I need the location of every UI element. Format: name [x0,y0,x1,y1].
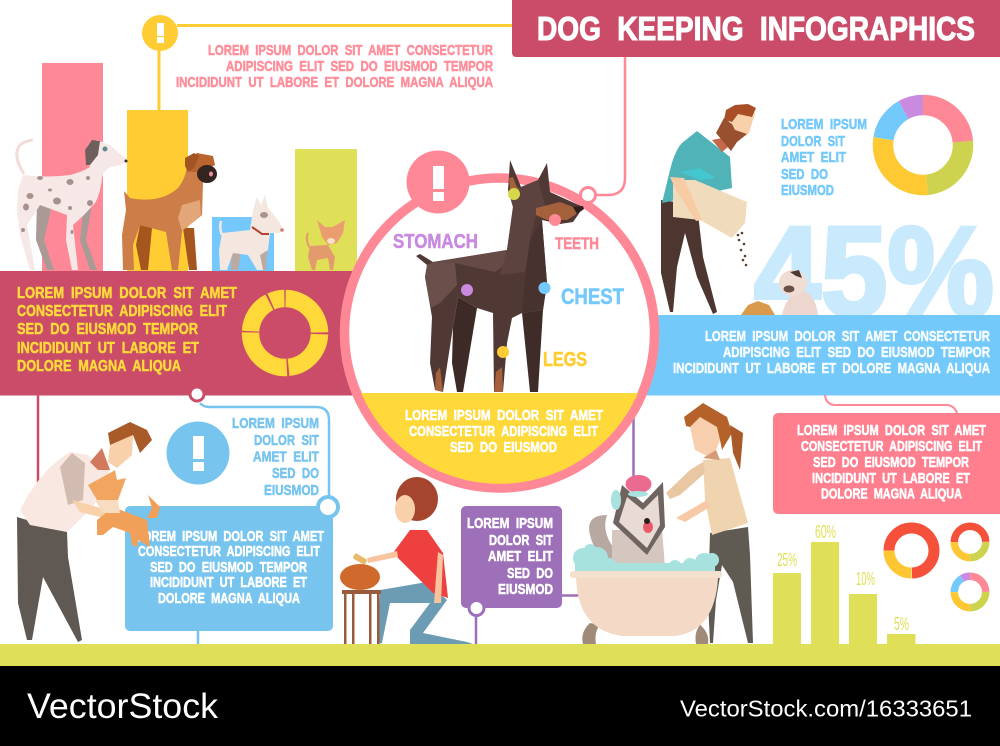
panel: purple text panel [461,506,562,608]
donut: small five part [949,571,991,613]
icon: yellow exclamation [142,15,178,51]
text block: top right blue lorem: DOLOR SIT [781,134,845,150]
connector node: purple panel [469,600,484,616]
food bowl [741,301,775,315]
donut: large red [889,528,934,573]
text block: crimson panel lorem [17,285,237,375]
text block: crimson panel lorem: SED DO EIUSMOD TEMPOR [17,321,198,338]
text block: blue panel lorem [673,329,990,377]
dog: dalmatian [17,140,127,270]
central circle [344,178,654,488]
text block: blue callout lorem: LOREM IPSUM [232,416,319,432]
text block: purple lorem: DOLOR SIT [489,533,553,549]
bar chart: percentages: 25% [777,550,797,570]
text block: pink panel lorem [797,423,986,502]
text block: blue lower lorem: CONSECTETUR ADIPISCING ELIT [138,544,320,560]
text block: crimson panel lorem: DOLORE MAGNA ALIQUA [17,358,181,375]
top yellow callout connector [159,26,515,110]
bar chart: percentages: 5% [894,614,909,634]
text block: top right blue lorem [781,117,867,199]
text block: blue lower lorem: SED DO EIUSMOD TEMPOR [150,560,307,576]
text block: blue callout lorem: EIUSMOD [264,483,319,499]
panel: pink text panel [773,413,1000,514]
donut: yellow segmented [239,287,331,379]
connector node: crimson panel [190,387,204,401]
bar chart: dog sizes [42,63,357,271]
bar chart: percentages [773,522,916,644]
panel: blue text panel lower [125,506,333,631]
text block: top pink lorem [176,43,493,91]
text block: purple lorem: LOREM IPSUM [467,516,553,532]
title banner [512,0,1000,57]
text block: blue lower lorem: INCIDIDUNT UT LABORE ET [150,575,307,591]
text block: blue lower lorem: DOLORE MAGNA ALIQUA [158,591,300,607]
text block: top right blue lorem: EIUSMOD [781,183,834,199]
donut: top right [869,91,977,199]
text block: purple lorem [467,516,553,598]
watermark: image id: VectorStock.com/16333651 [680,696,972,722]
anatomy markers [461,188,561,358]
label: chest: CHEST [561,284,624,309]
ground strip [0,644,1000,666]
bath foam [573,544,719,574]
text block: purple lorem: EIUSMOD [498,582,553,598]
person: woman washing dog [666,403,753,643]
text block: crimson panel lorem: CONSECTETUR ADIPISCING ELIT [17,303,227,320]
bar chart: percentages: 60% [815,522,836,542]
text block: top pink lorem: ADIPISCING ELIT SED DO EIUSMOD TEMPOR [226,59,493,75]
bar chart: percentages: 10% [856,569,875,589]
dog: pug [779,270,818,315]
text block: blue lower lorem [136,529,324,607]
connector node: blue panel [318,497,338,517]
person: kneeling woman grooming [340,477,473,644]
dog: corgi [88,470,160,547]
dog: chihuahua [307,220,345,270]
connector: blue callout [198,403,329,644]
panel: crimson text panel [0,271,360,396]
dog: husky in bath [589,475,665,567]
text block: top pink lorem: LOREM IPSUM DOLOR SIT AMET CONSECTETUR [208,43,493,59]
text block: crimson panel lorem: INCIDIDUNT UT LABORE ET [17,340,199,357]
text block: purple lorem: SED DO [507,566,553,582]
dog: boxer [122,153,217,270]
icon: blue exclamation [166,422,230,484]
text block: yellow segment lorem: CONSECTETUR ADIPISCING ELIT [409,424,598,440]
text block: top pink lorem: INCIDIDUNT UT LABORE ET DOLORE MAGNA ALIQUA [176,75,493,91]
connector: pink right [825,395,957,413]
watermark: brand: VectorStock [27,687,219,726]
person: man pouring food [661,104,756,314]
label: legs: LEGS [543,349,587,371]
donut: small three part [954,526,986,558]
text block: blue lower lorem: LOREM IPSUM DOLOR SIT AMET [136,529,324,545]
connectors: crimson left [37,395,39,490]
panel: blue text panel [640,315,1000,396]
label: stomach: STOMACH [393,231,478,253]
watermark band [0,666,1000,746]
text block: blue callout lorem: SED DO [272,466,319,482]
text block: top right blue lorem: SED DO [781,167,828,183]
connector: purple vertical [476,415,634,644]
yellow segment [361,393,638,484]
icon: pink exclamation [406,150,470,214]
text block: blue callout lorem [232,416,319,499]
text block: top right blue lorem: LOREM IPSUM [781,117,867,133]
person: man holding corgi [17,422,160,642]
connector: title to circle [596,57,625,195]
label: teeth: TEETH [555,234,599,253]
text block: top right blue lorem: AMET ELIT [781,150,846,166]
text block: yellow segment lorem: SED DO EIUSMOD [450,440,557,456]
text block: purple lorem: AMET ELIT [488,549,553,565]
grooming stool [342,590,381,644]
text block: blue callout lorem: DOLOR SIT [254,433,319,449]
text block: yellow segment lorem [405,408,603,456]
text block: blue callout lorem: AMET ELIT [253,450,319,466]
text block: yellow segment lorem: LOREM IPSUM DOLOR SIT AMET [405,408,603,424]
dog: bull terrier [219,195,284,270]
connector node: title [580,188,596,202]
text block: crimson panel lorem: LOREM IPSUM DOLOR SIT AMET [17,285,237,302]
dog: doberman [416,160,584,392]
dog: fluffy small [340,553,380,590]
bathtub [570,571,722,644]
